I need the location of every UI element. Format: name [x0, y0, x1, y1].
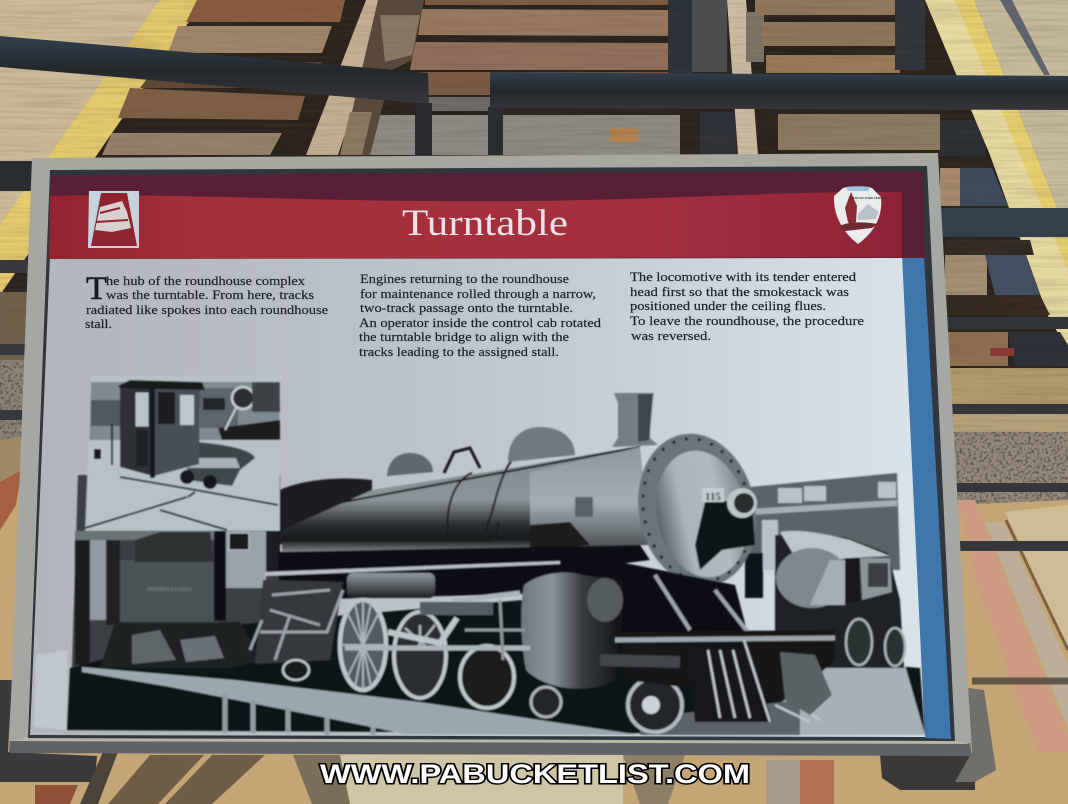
- icon: National Park Service arrowhead: [834, 186, 887, 244]
- left wooden deck: [0, 0, 165, 235]
- text column 3: was reversed.: [631, 329, 711, 343]
- main photograph: steam locomotive on turntable: 115: [705, 491, 721, 503]
- rusty right rails: [958, 500, 1068, 804]
- tender: PENNSYLVANIA: [147, 587, 193, 593]
- ties, centre group: [408, 0, 692, 100]
- smokebox: [624, 423, 770, 597]
- sign support brackets: [0, 680, 996, 804]
- side rods: [345, 593, 530, 660]
- maroon header shade: [49, 171, 925, 259]
- background locomotive: [200, 382, 280, 440]
- bottom ground and posts: [0, 752, 1068, 804]
- cab roof: [280, 478, 372, 545]
- left side pipes: [0, 161, 34, 191]
- right ties beside sign: [940, 168, 1068, 432]
- top left pipe: [0, 36, 429, 104]
- control cab: [118, 380, 205, 478]
- text column 1: radiated like spokes into each roundhouse: [86, 303, 329, 317]
- domes: [387, 453, 433, 476]
- text column 1: [85, 271, 329, 331]
- railing posts: [415, 103, 432, 157]
- sign frame: [9, 153, 972, 756]
- text column 2: Engines returning to the roundhouse: [360, 272, 570, 286]
- ground left: [0, 440, 30, 804]
- logo: locomotive on turntable: [88, 191, 139, 248]
- text column 3: positioned under the ceiling flues.: [630, 299, 826, 313]
- cylinder: [521, 572, 622, 689]
- cowcatcher and pipes: [600, 630, 835, 722]
- watermark: WWW.PABUCKETLIST.COM: [320, 759, 750, 789]
- text column 1: he hub of the roundhouse complex: [106, 274, 306, 288]
- railing pipes: [0, 36, 1068, 551]
- drop cap: T: [86, 271, 107, 307]
- text column 2: the turntable bridge to align with the: [359, 330, 570, 344]
- smokestack: [612, 393, 658, 447]
- worn photo corner: [34, 650, 68, 730]
- air tank: [347, 573, 435, 598]
- text column 2: tracks leading to the assigned stall.: [359, 345, 559, 359]
- title: Turntable: [402, 203, 568, 244]
- red title band: [49, 192, 902, 259]
- ground right side: [740, 665, 925, 735]
- metal deck plate: [365, 97, 680, 155]
- left ties and gravel: [0, 292, 34, 445]
- text column 2: for maintenance rolled through a narrow,: [360, 287, 596, 301]
- signal post: [95, 424, 112, 465]
- driving wheels: [283, 600, 514, 708]
- left photo background: [70, 475, 280, 730]
- text column 3: The locomotive with its tender entered: [630, 270, 857, 284]
- text column 3: To leave the roundhouse, the procedure: [630, 314, 865, 328]
- turntable platform: [82, 667, 640, 735]
- text column 2: An operator inside the control cab rotated: [359, 316, 602, 330]
- ties, left group: [102, 0, 345, 155]
- ground right: [880, 500, 1068, 804]
- right wooden deck: [974, 0, 1068, 235]
- inset photograph: turntable control cab: [85, 375, 281, 531]
- left rail: [306, 0, 424, 155]
- sign panel: [28, 166, 955, 741]
- main photograph: steam locomotive on turntable: [67, 393, 925, 735]
- blue shadow strip on right: [902, 255, 951, 739]
- frame bottom rail: [9, 741, 972, 756]
- text column 3: head first so that the smokestack was: [630, 285, 849, 299]
- deck below locomotive: [67, 590, 925, 735]
- top right pipe: [490, 72, 1068, 110]
- left yellow rail strip: [0, 0, 204, 295]
- running board and frame: [278, 545, 650, 600]
- building in background: [750, 473, 900, 570]
- text column 2: [359, 272, 602, 359]
- boiler pipes: [280, 447, 640, 541]
- right gravel: [953, 432, 1068, 510]
- right rail: [692, 0, 764, 155]
- frame under boiler: [610, 560, 748, 650]
- text column 1: stall.: [85, 317, 112, 331]
- smokebox rivets plates: [530, 447, 650, 548]
- icon: National Park Service arrowhead: NATIONAL PARK SERVICE: [849, 196, 887, 200]
- right ground shadows: [972, 681, 1068, 764]
- ties, right group: [755, 0, 985, 156]
- tender: [100, 531, 280, 668]
- pit: [198, 442, 255, 470]
- right side pipes: [940, 208, 1068, 237]
- right yellow rail strip: [925, 0, 1068, 350]
- ground around pit: [85, 440, 280, 531]
- boiler: [282, 447, 640, 552]
- rear running gear: [255, 580, 343, 664]
- second locomotive: [745, 531, 905, 668]
- text column 2: two-track passage onto the turntable.: [360, 301, 573, 315]
- panel background: [30, 255, 926, 737]
- pony wheels: [531, 687, 561, 717]
- text column 3: [630, 270, 865, 343]
- text column 1: was the turntable. From here, tracks: [106, 288, 314, 302]
